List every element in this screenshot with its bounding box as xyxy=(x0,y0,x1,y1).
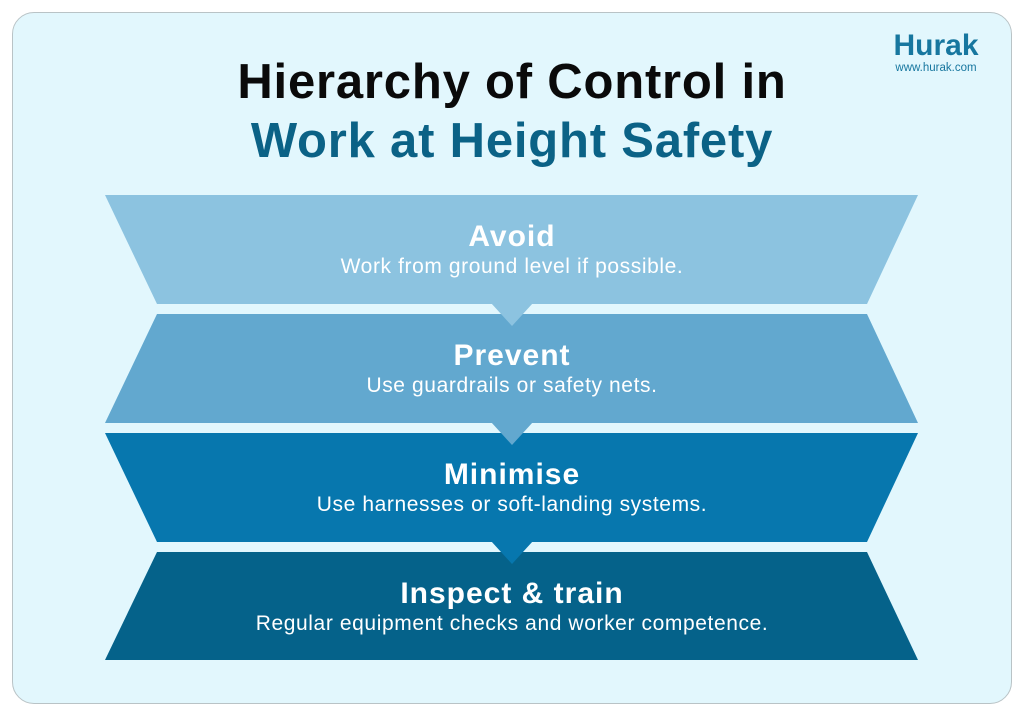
text: minimise xyxy=(317,458,707,516)
title xyxy=(237,55,787,168)
arrow notch 2 xyxy=(491,422,533,445)
text: avoid xyxy=(340,220,683,278)
text: inspect: Inspect & train xyxy=(400,577,624,610)
title: Hierarchy of Control in xyxy=(237,55,787,109)
text: prevent: Prevent xyxy=(453,339,571,372)
text: minimise: Use harnesses or soft-landing systems. xyxy=(317,493,707,516)
band: inspect xyxy=(105,552,918,660)
logo: Hurak xyxy=(893,29,979,62)
text: inspect: Regular equipment checks and worker competence. xyxy=(256,612,768,635)
text: avoid: Avoid xyxy=(468,220,556,253)
text: inspect xyxy=(256,577,768,635)
logo: www.hurak.com xyxy=(895,62,977,74)
arrow notch 1 xyxy=(491,303,533,326)
band: prevent xyxy=(105,314,918,423)
band: avoid xyxy=(105,195,918,304)
text: prevent xyxy=(366,339,658,397)
text: minimise: Minimise xyxy=(444,458,580,491)
text: prevent: Use guardrails or safety nets. xyxy=(366,374,658,397)
band: minimise xyxy=(105,433,918,542)
text: avoid: Work from ground level if possible. xyxy=(341,255,683,278)
arrow notch 3 xyxy=(491,541,533,564)
title: Work at Height Safety xyxy=(251,114,773,168)
